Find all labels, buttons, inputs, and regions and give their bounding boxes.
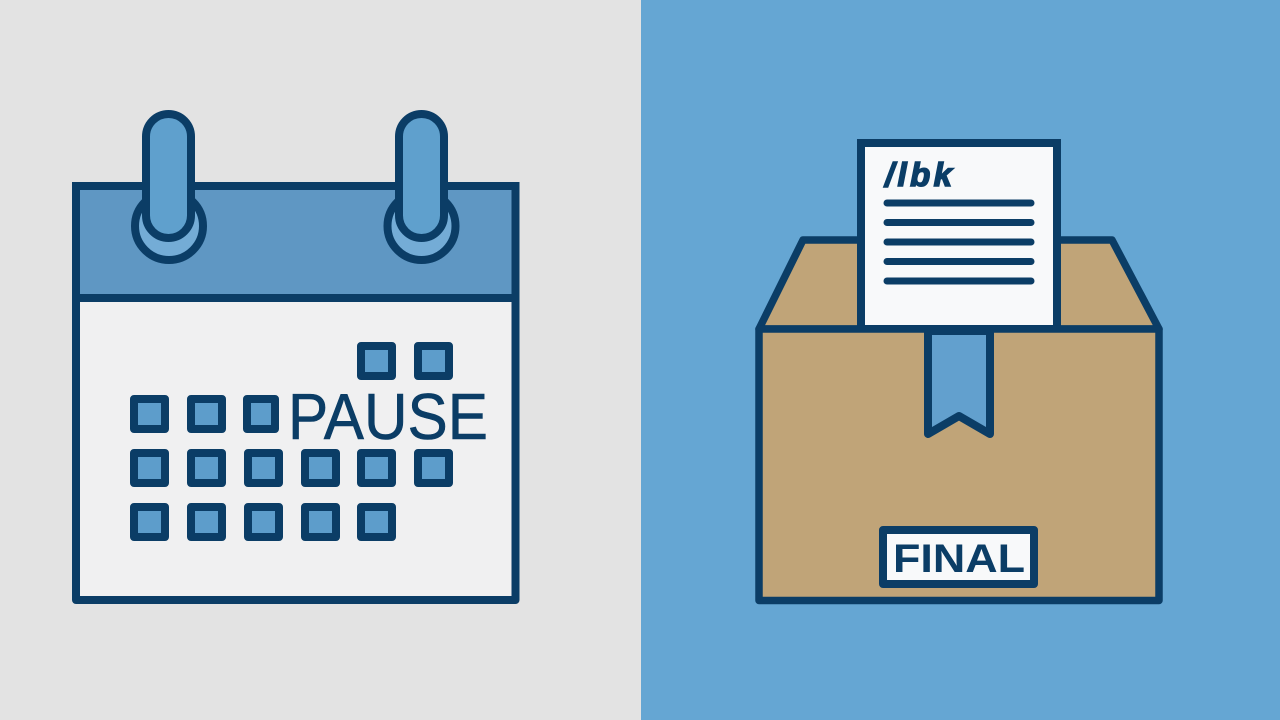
bookmark ribbon xyxy=(928,331,990,434)
final label xyxy=(883,530,1034,584)
pause label: PAUSE xyxy=(288,380,488,453)
right binder ring xyxy=(388,114,456,260)
document heading scribble: /lbk xyxy=(883,156,954,193)
date squares xyxy=(134,346,449,537)
calendar body xyxy=(76,186,516,600)
box front xyxy=(759,329,1159,600)
document text lines xyxy=(887,203,1031,281)
calendar header band xyxy=(76,186,516,298)
left binder ring xyxy=(135,114,203,260)
panel: left background xyxy=(0,0,641,720)
icon: calendar xyxy=(76,114,516,600)
box open flaps xyxy=(759,240,1159,329)
icon: archive box with document xyxy=(759,143,1159,600)
panel: right background xyxy=(641,0,1280,720)
document xyxy=(861,143,1057,329)
final label: FINAL xyxy=(893,537,1025,581)
